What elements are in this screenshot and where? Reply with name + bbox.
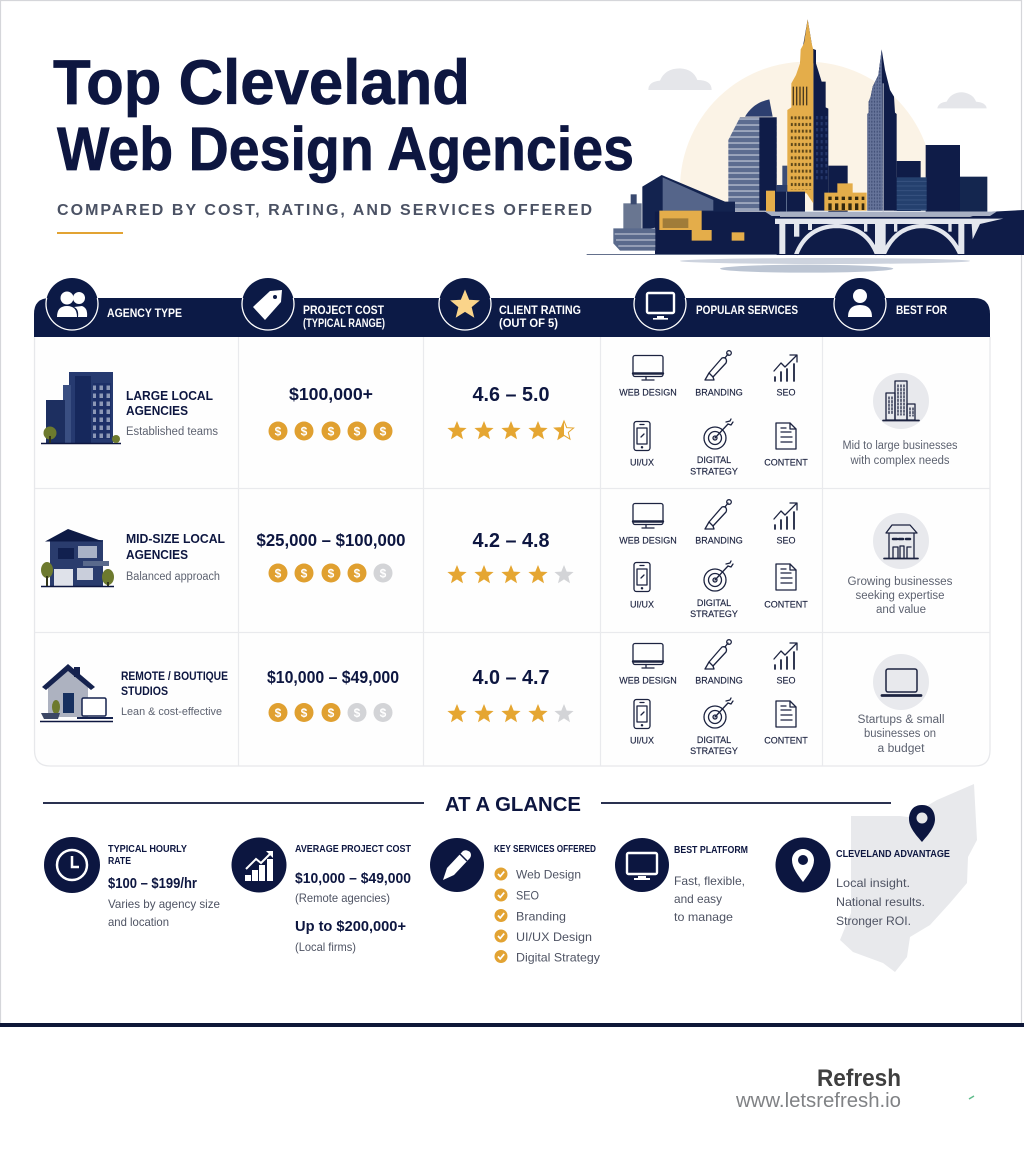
stat: average project cost: AVERAGE PROJECT COST xyxy=(295,844,411,855)
title: Web Design Agencies xyxy=(57,115,634,183)
header: agency type xyxy=(46,278,182,330)
services: WEB DESIGN xyxy=(619,536,677,546)
agency label xyxy=(121,671,228,718)
cost: $10,000 – $49,000 xyxy=(267,667,399,687)
stat: best platform: BEST PLATFORM xyxy=(674,845,748,856)
stat: key services: Branding xyxy=(516,910,566,924)
agency label: REMOTE / BOUTIQUE xyxy=(121,671,228,683)
services: DIGITAL xyxy=(697,735,731,745)
icon: pencil xyxy=(430,838,484,892)
stat: Cleveland advantage: Stronger ROI. xyxy=(836,914,911,928)
icon: growth chart xyxy=(232,838,286,892)
icon: house with laptop xyxy=(40,664,113,722)
best for: Startups & small xyxy=(858,714,944,726)
convention centre xyxy=(623,203,642,229)
heading: at a glance: AT A GLANCE xyxy=(445,794,581,816)
bridge xyxy=(777,210,1024,255)
agency label: STUDIOS xyxy=(121,686,168,698)
services: SEO xyxy=(776,536,796,546)
rating stars xyxy=(447,421,574,439)
stat: key services: Web Design xyxy=(516,868,581,882)
agency label xyxy=(126,532,225,583)
subtitle: COMPARED BY COST, RATING, AND SERVICES OFFERED xyxy=(57,202,592,219)
services: SEO xyxy=(776,388,796,398)
best for: Mid to large businesses xyxy=(842,440,958,452)
agency label: LARGE LOCAL xyxy=(126,389,213,403)
services: DIGITAL xyxy=(697,598,731,608)
header: client rating xyxy=(439,278,581,330)
stat: best platform xyxy=(615,838,748,924)
services: UI/UX xyxy=(630,458,654,468)
cost coins: $ xyxy=(354,424,361,438)
cost: $25,000 – $100,000 xyxy=(256,530,406,550)
row: mid-size local agencies xyxy=(41,500,953,619)
services: UI/UX xyxy=(630,600,654,610)
footer speck xyxy=(969,1096,974,1099)
header: best for xyxy=(834,278,948,330)
services: CONTENT xyxy=(764,736,808,746)
stat: average project cost: $10,000 – $49,000 xyxy=(295,871,411,887)
cost: $100,000+ xyxy=(289,384,373,404)
cost coins: $ xyxy=(275,566,282,580)
best for: seeking expertise xyxy=(856,590,944,602)
header: project cost: (TYPICAL RANGE) xyxy=(303,318,385,330)
stat: average project cost xyxy=(232,838,411,954)
header: agency type: AGENCY TYPE xyxy=(107,308,182,320)
Ohio map xyxy=(840,784,977,972)
cost coins xyxy=(268,564,392,582)
cost coins: $ xyxy=(328,706,335,720)
best for: a budget xyxy=(878,743,925,755)
low gold buildings xyxy=(766,183,867,211)
title xyxy=(53,48,634,183)
services: STRATEGY xyxy=(690,466,738,476)
rating stars xyxy=(447,704,574,722)
stat: best platform: to manage xyxy=(674,910,733,924)
cost coins xyxy=(268,703,392,722)
services: UI/UX xyxy=(630,736,654,746)
agency label: MID-SIZE LOCAL xyxy=(126,532,225,546)
stat: typical hourly rate: RATE xyxy=(108,856,131,867)
best for xyxy=(842,373,958,467)
header: project cost: PROJECT COST xyxy=(303,305,384,317)
row: remote / boutique studios xyxy=(40,640,944,756)
header: popular services xyxy=(634,278,798,330)
best for: Growing businesses xyxy=(848,576,953,588)
services: STRATEGY xyxy=(690,609,738,619)
agency label: Balanced approach xyxy=(126,571,220,583)
header bar xyxy=(34,298,990,337)
services xyxy=(619,500,808,619)
stat: Cleveland advantage: Local insight. xyxy=(836,876,910,890)
header: popular services: POPULAR SERVICES xyxy=(696,305,798,317)
footer brand: www.letsrefresh.io xyxy=(735,1090,901,1112)
Terminal Tower xyxy=(800,19,828,211)
cost coins: $ xyxy=(380,424,387,438)
footer brand xyxy=(735,1065,901,1112)
stat: Cleveland advantage: CLEVELAND ADVANTAGE xyxy=(836,849,950,860)
stat: typical hourly rate xyxy=(44,837,220,929)
cost coins: $ xyxy=(328,424,335,438)
best for: with complex needs xyxy=(850,455,950,467)
bottom rule xyxy=(0,1023,1024,1027)
cost coins: $ xyxy=(275,706,282,720)
accent rule xyxy=(57,232,123,234)
icon: two-storey office xyxy=(41,529,114,586)
services: DIGITAL xyxy=(697,455,731,465)
services: BRANDING xyxy=(695,676,743,686)
cost coins: $ xyxy=(301,424,308,438)
rating: 4.2 – 4.8 xyxy=(472,530,550,552)
best for xyxy=(848,513,953,616)
map pin xyxy=(909,805,935,842)
cost coins: $ xyxy=(380,566,387,580)
stat: Cleveland advantage xyxy=(776,838,950,928)
rating stars xyxy=(447,565,574,583)
header: client rating: (OUT OF 5) xyxy=(499,318,558,330)
stat: average project cost: (Remote agencies) xyxy=(295,891,390,905)
back buildings xyxy=(777,145,987,212)
services: WEB DESIGN xyxy=(619,676,677,686)
icon: office building xyxy=(41,372,121,444)
best for xyxy=(858,654,944,755)
services xyxy=(619,640,808,756)
icon: location pin xyxy=(776,838,830,892)
rating: 4.6 – 5.0 xyxy=(472,384,550,406)
panel: comparison table xyxy=(34,337,990,766)
cost coins: $ xyxy=(354,566,361,580)
title: Top Cleveland xyxy=(53,48,470,118)
stat: typical hourly rate: $100 – $199/hr xyxy=(108,876,197,892)
cost coins: $ xyxy=(380,706,387,720)
agency label xyxy=(126,389,218,438)
row: large local agencies xyxy=(41,351,958,476)
stat: best platform: and easy xyxy=(674,892,722,906)
agency label: AGENCIES xyxy=(126,548,188,562)
footer brand: Refresh xyxy=(817,1065,901,1092)
clouds xyxy=(648,68,987,108)
stat: typical hourly rate: and location xyxy=(108,915,169,929)
header: project cost xyxy=(242,278,385,330)
icon: clock xyxy=(44,837,100,893)
curved tower xyxy=(728,117,777,211)
services: STRATEGY xyxy=(690,746,738,756)
stat: key services xyxy=(430,838,600,964)
stat: key services: Digital Strategy xyxy=(516,950,600,964)
waterline xyxy=(587,253,780,256)
cost coins xyxy=(268,422,392,440)
illustration: Cleveland skyline xyxy=(587,19,1024,273)
best for: and value xyxy=(876,604,926,616)
rating: 4.0 – 4.7 xyxy=(472,667,550,689)
cost coins: $ xyxy=(301,706,308,720)
stat: key services: KEY SERVICES OFFERED xyxy=(494,844,596,855)
agency label: Lean & cost-effective xyxy=(121,706,222,718)
services: CONTENT xyxy=(764,600,808,610)
cost coins: $ xyxy=(328,566,335,580)
agency label: Established teams xyxy=(126,426,218,438)
stat: Cleveland advantage: National results. xyxy=(836,895,925,909)
cost coins: $ xyxy=(301,566,308,580)
lakefront base xyxy=(655,212,780,255)
icon: monitor xyxy=(615,838,669,892)
services: WEB DESIGN xyxy=(619,388,677,398)
services xyxy=(619,351,808,476)
services: BRANDING xyxy=(695,388,743,398)
services: SEO xyxy=(776,676,796,686)
sun xyxy=(680,62,933,211)
Key Tower xyxy=(867,49,897,211)
stat: key services: UI/UX Design xyxy=(516,930,592,944)
agency label: AGENCIES xyxy=(126,404,188,418)
services: BRANDING xyxy=(695,536,743,546)
stat: average project cost: Up to $200,000+ xyxy=(295,919,406,935)
header: client rating: CLIENT RATING xyxy=(499,305,581,317)
stat: best platform: Fast, flexible, xyxy=(674,874,745,888)
services: CONTENT xyxy=(764,458,808,468)
stat: typical hourly rate: TYPICAL HOURLY xyxy=(108,844,187,855)
stat: average project cost: (Local firms) xyxy=(295,940,356,954)
best for: businesses on xyxy=(864,728,936,740)
stat: typical hourly rate: Varies by agency size xyxy=(108,897,220,911)
stat: key services: SEO xyxy=(516,888,539,902)
header: best for: BEST FOR xyxy=(896,305,948,317)
cost coins: $ xyxy=(354,706,361,720)
cost coins: $ xyxy=(275,424,282,438)
